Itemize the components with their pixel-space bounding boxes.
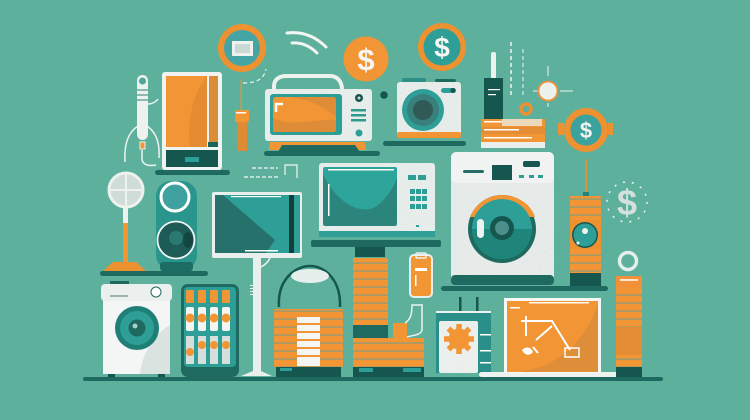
icon: small ring: [620, 252, 636, 270]
appliance: right orange column: [616, 276, 642, 377]
dashed marks: [244, 165, 297, 178]
icon: teal dollar coin: $: [434, 32, 450, 63]
appliance: wall monitor on stand: [212, 192, 302, 376]
appliance: orange column with lower stack: [353, 247, 424, 377]
icon: dollar lens coin: $: [580, 118, 592, 143]
appliance: orange cylinder with orb: [570, 159, 601, 286]
appliance: domed orange basket: [274, 266, 343, 377]
appliance: control panel with meters: [181, 284, 239, 377]
shelf: right: [441, 286, 608, 291]
appliance: gear machine: [436, 297, 491, 373]
icon: sketched dollar sign: $: [617, 182, 637, 223]
icon: dollar lens coin: [558, 108, 613, 152]
appliance: medium microwave: [319, 163, 435, 237]
appliance: probe tool: [235, 79, 249, 151]
appliance: bottom-left washing machine: [101, 281, 172, 377]
appliance: speaker: [156, 181, 197, 271]
dashed connector: [243, 69, 266, 83]
appliance: pedestal fan: [103, 173, 146, 271]
icon: dollar coin: [344, 36, 388, 82]
icon: teal dollar coin: [418, 23, 466, 71]
dashed vertical lines: [511, 42, 523, 98]
appliance: small front-load washer: [383, 78, 466, 146]
icon: sketched dollar sign: [607, 182, 647, 223]
appliance: small orange battery: [410, 253, 432, 297]
shelf: left: [100, 271, 208, 276]
icon: small dark gear: [380, 91, 388, 99]
appliance: handheld brush tool: [125, 75, 159, 165]
icon: target lens: [533, 66, 573, 107]
appliance: large washing machine: [451, 152, 554, 285]
appliance: refrigerator: [155, 72, 230, 175]
shelf: floor: [83, 377, 663, 381]
icon: wifi arcs: [287, 33, 326, 53]
icon: chip coin: [218, 24, 266, 72]
icon: small orange gear: [521, 104, 531, 114]
appliance: laptop with orange diagram: [479, 298, 627, 377]
shelf: middle: [311, 240, 441, 247]
appliance: top microwave oven: [264, 76, 380, 156]
appliance: antenna stack tower: [481, 52, 545, 148]
icon: dollar coin: $: [357, 42, 375, 77]
